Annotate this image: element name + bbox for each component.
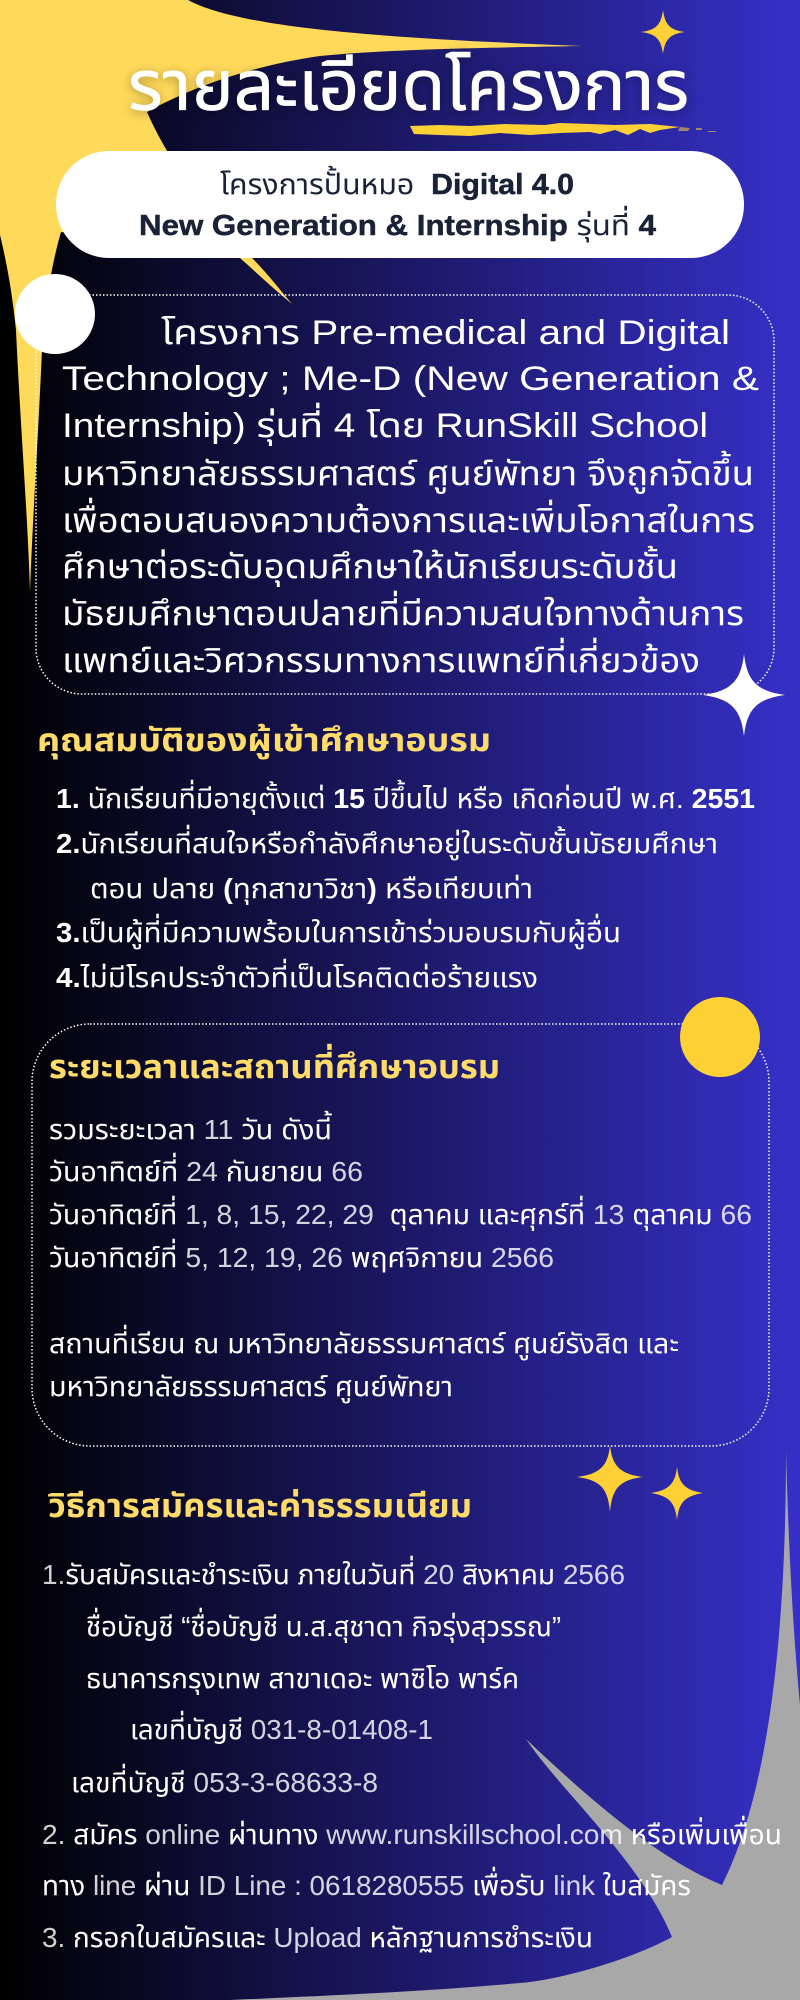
application steps: ชื่อบัญชี “ชื่อบัญชี น.ส.สุชาดา กิจรุ่งสุวรรณ” [86, 1607, 561, 1643]
white circle [15, 274, 95, 354]
application steps: 2. สมัคร online ผ่านทาง www.runskillschool.com หรือเพิ่มเพื่อน [42, 1815, 782, 1850]
application steps: ธนาคารกรุงเทพ สาขาเดอะ พาซิโอ พาร์ค [86, 1663, 519, 1695]
qualifications list: ตอน ปลาย (ทุกสาขาวิชา) หรือเทียบเท่า [90, 873, 533, 905]
schedule lines: วันอาทิตย์ที่ 24 กันยายน 66 [49, 1152, 363, 1187]
heading: qualifications: คุณสมบัติของผู้เข้าศึกษาอบรม [37, 722, 491, 759]
application steps: ทาง line ผ่าน ID Line : 0618280555 เพื่อรับ link ใบสมัคร [42, 1866, 691, 1901]
brush underline [410, 123, 716, 136]
description paragraph: แพทย์และวิศวกรรมทางการแพทย์ที่เกี่ยวข้อง [62, 637, 700, 680]
venue lines [49, 1324, 679, 1404]
qualifications list [56, 779, 755, 993]
yellow swoosh shape [0, 0, 582, 592]
gray swoosh shape [230, 1450, 800, 2000]
description paragraph: มหาวิทยาลัยธรรมศาสตร์ ศูนย์พัทยา จึงถูกจัดขึ้น [62, 450, 754, 494]
white pill: programme name [56, 151, 744, 258]
venue lines: สถานที่เรียน ณ มหาวิทยาลัยธรรมศาสตร์ ศูนย์รังสิต และ [49, 1324, 679, 1361]
description paragraph [62, 314, 759, 680]
panel: project description [36, 295, 774, 694]
application steps [42, 1555, 782, 1953]
application steps: เลขที่บัญชี 053-3-68633-8 [71, 1763, 378, 1798]
qualifications list: 2.นักเรียนที่สนใจหรือกำลังศึกษาอยู่ในระดับชั้นมัธยมศึกษา [56, 824, 718, 861]
description paragraph: Technology ; Me-D (New Generation & [62, 360, 759, 398]
qualifications list: 3.เป็นผู้ที่มีความพร้อมในการเข้าร่วมอบรมกับผู้อื่น [56, 913, 621, 950]
white star [703, 654, 785, 736]
pill line 2: New Generation & Internship รุ่นที่ 4 [139, 205, 656, 242]
schedule lines: วันอาทิตย์ที่ 5, 12, 19, 26 พฤศจิกายน 2566 [49, 1238, 554, 1273]
panel: schedule and venue [32, 1024, 769, 1446]
pill line 1: โครงการปั้นหมอ Digital 4.0 [220, 165, 574, 201]
heading: application and fees: วิธีการสมัครและค่าธรรมเนียม [48, 1487, 472, 1524]
schedule lines [49, 1110, 752, 1273]
star: small yellow [651, 1467, 703, 1520]
description paragraph: Internship) รุ่นที่ 4 โดย RunSkill School [62, 402, 708, 446]
schedule lines: วันอาทิตย์ที่ 1, 8, 15, 22, 29 ตุลาคม และศุกร์ที่ 13 ตุลาคม 66 [49, 1195, 752, 1231]
star: top right [641, 10, 685, 54]
description paragraph: เพื่อตอบสนองความต้องการและเพิ่มโอกาสในการ [62, 497, 755, 540]
application steps: เลขที่บัญชี 031-8-01408-1 [130, 1710, 433, 1745]
qualifications list: 1. นักเรียนที่มีอายุตั้งแต่ 15 ปีขึ้นไป หรือ เกิดก่อนปี พ.ศ. 2551 [56, 779, 755, 815]
application steps: 3. กรอกใบสมัครและ Upload หลักฐานการชำระเงิน [42, 1922, 593, 1953]
qualifications list: 4.ไม่มีโรคประจำตัวที่เป็นโรคติดต่อร้ายแรง [56, 958, 538, 993]
yellow circle [680, 997, 760, 1077]
application steps: 1.รับสมัครและชำระเงิน ภายในวันที่ 20 สิงหาคม 2566 [42, 1555, 625, 1590]
star: large yellow [577, 1445, 643, 1512]
title: รายละเอียดโครงการ [128, 47, 689, 125]
heading: schedule and venue: ระยะเวลาและสถานที่ศึกษาอบรม [49, 1043, 500, 1085]
description paragraph: ศึกษาต่อระดับอุดมศึกษาให้นักเรียนระดับชั้น [62, 545, 678, 587]
description paragraph: โครงการ Pre-medical and Digital [161, 314, 730, 352]
description paragraph: มัธยมศึกษาตอนปลายที่มีความสนใจทางด้านการ [62, 590, 744, 633]
schedule lines: รวมระยะเวลา 11 วัน ดังนี้ [49, 1110, 332, 1145]
venue lines: มหาวิทยาลัยธรรมศาสตร์ ศูนย์พัทยา [49, 1371, 453, 1404]
